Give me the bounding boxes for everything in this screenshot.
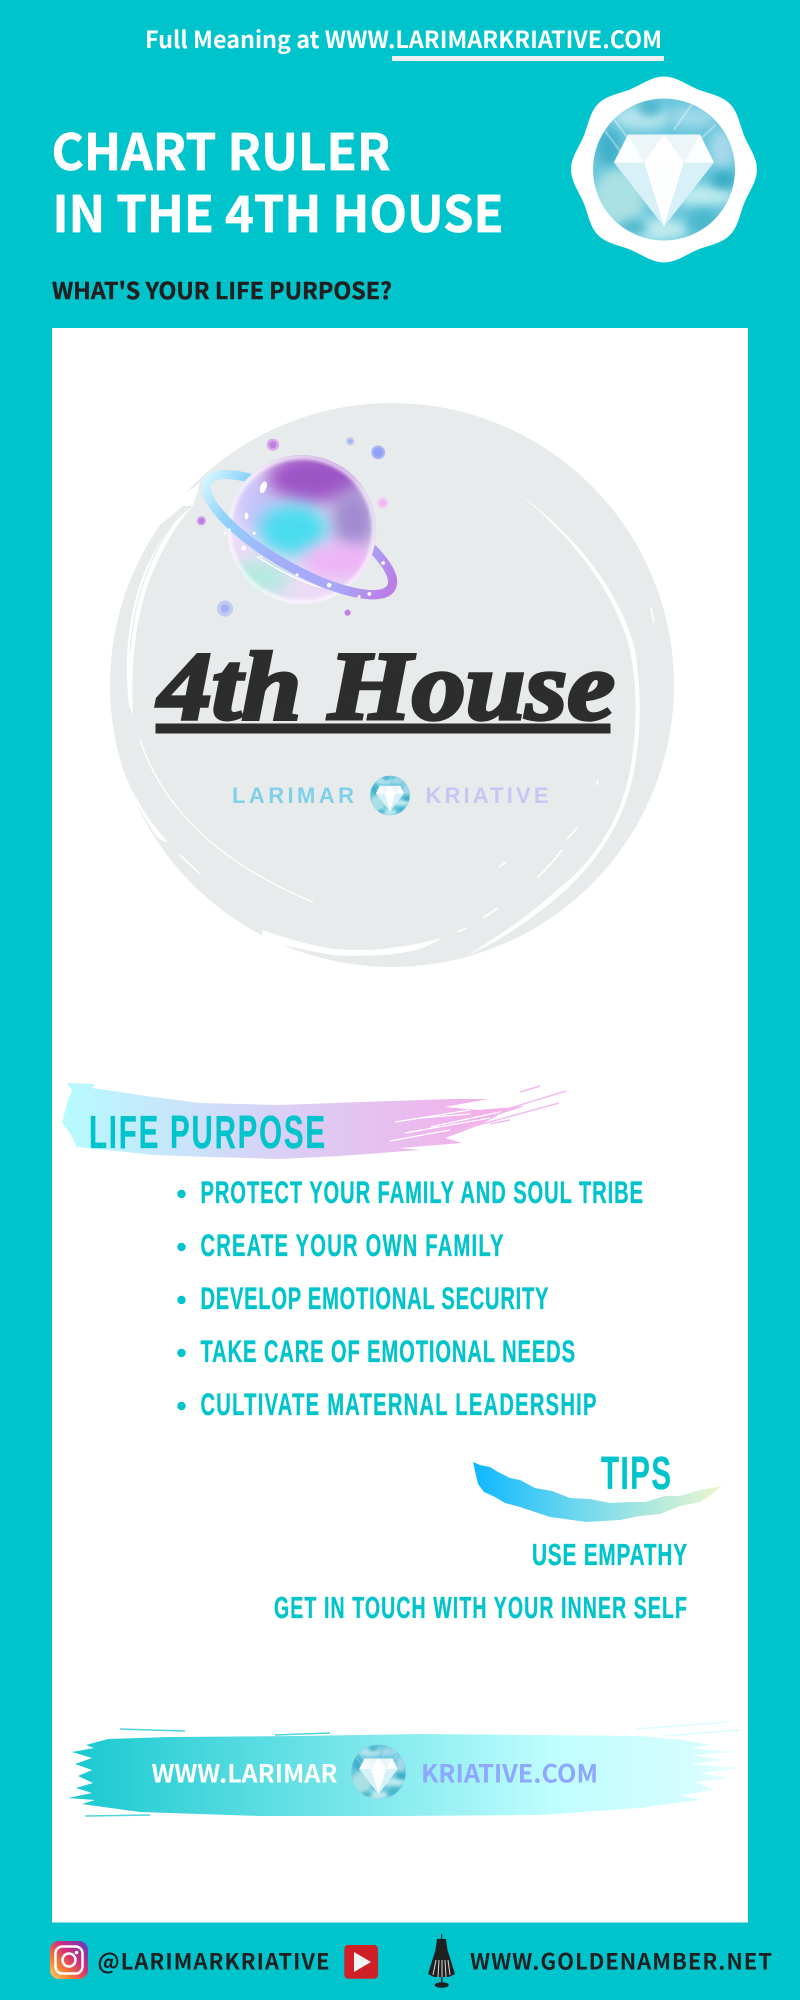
text: instagram handle: @LARIMARKRIATIVE: [98, 1944, 330, 1976]
list: life purpose items: [177, 1174, 643, 1422]
title: IN THE 4TH HOUSE: [52, 175, 504, 247]
text: kriative.com: KRIATIVE.COM: [421, 1754, 598, 1790]
text: www.larimar: WWW.LARIMAR: [152, 1754, 338, 1790]
planet illustration: [197, 437, 393, 617]
list: life purpose items: CREATE YOUR OWN FAMILY: [200, 1227, 504, 1263]
panel: main white card: [52, 328, 748, 1922]
planet ring front: [206, 482, 391, 598]
list: life purpose items: DEVELOP EMOTIONAL SECURITY: [200, 1280, 549, 1316]
icon: youtube: [344, 1945, 378, 1979]
brush stroke: life purpose: [62, 1083, 566, 1159]
heading: tips: TIPS: [601, 1449, 671, 1500]
title: CHART RULER: [52, 113, 390, 185]
website banner: [68, 1722, 742, 1816]
icon: diamond badge: [571, 76, 757, 262]
section: tips: [274, 1449, 722, 1625]
brush stroke: tips: [473, 1462, 722, 1522]
icon: dress: [428, 1934, 455, 1988]
text: golden amber site: WWW.GOLDENAMBER.NET: [470, 1944, 772, 1976]
footer: [50, 1934, 772, 1988]
logo: Larimar Kriative: [232, 776, 548, 815]
subtitle: WHAT'S YOUR LIFE PURPOSE?: [52, 272, 392, 306]
icon: banner gem: [351, 1745, 407, 1799]
list: life purpose items: TAKE CARE OF EMOTIONAL NEEDS: [200, 1333, 575, 1369]
planet sphere: [226, 452, 376, 604]
text: get in touch: GET IN TOUCH WITH YOUR INNER SELF: [274, 1592, 687, 1625]
title: [52, 113, 504, 247]
list: life purpose items: PROTECT YOUR FAMILY AND SOUL TRIBE: [200, 1174, 643, 1210]
grey brush disc: [110, 403, 674, 967]
top link text: Full Meaning at WWW.LARIMARKRIATIVE.COM: [145, 21, 662, 55]
icon: instagram: [50, 1941, 88, 1979]
list: life purpose items: CULTIVATE MATERNAL LEADERSHIP: [200, 1386, 596, 1422]
section: life purpose: [62, 1083, 643, 1422]
logo: Larimar Kriative: KRIATIVE: [426, 783, 548, 808]
sparkle dots: [197, 437, 389, 617]
heading: 4th House: 4th House: [156, 633, 615, 740]
text: use empathy: USE EMPATHY: [532, 1537, 687, 1572]
logo: Larimar Kriative: LARIMAR: [232, 783, 354, 808]
planet ring back: [206, 475, 393, 595]
brush stroke: banner: [68, 1722, 742, 1816]
heading: life purpose: LIFE PURPOSE: [89, 1108, 325, 1159]
